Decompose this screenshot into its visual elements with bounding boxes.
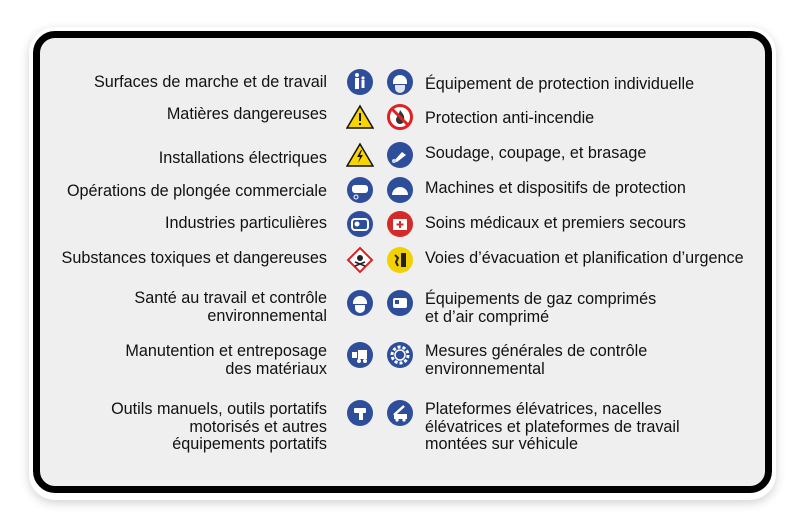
label: Santé au travail et contrôle bbox=[134, 289, 327, 307]
label bbox=[425, 342, 647, 378]
label: Industries particulières bbox=[165, 214, 327, 232]
label bbox=[125, 342, 327, 378]
icon: drill bbox=[347, 400, 373, 426]
label: des matériaux bbox=[225, 360, 327, 378]
label: Mesures générales de contrôle bbox=[425, 342, 647, 360]
right labels: Équipement de protection individuelle bbox=[425, 75, 694, 93]
icon: walking people bbox=[347, 69, 373, 95]
label: environnemental bbox=[425, 360, 545, 378]
label: Équipements de gaz comprimés bbox=[425, 290, 656, 308]
label: Outils manuels, outils portatifs bbox=[111, 400, 327, 418]
icon: emergency exit bbox=[387, 247, 413, 273]
label: Substances toxiques et dangereuses bbox=[62, 249, 327, 267]
icon: no fire bbox=[387, 104, 413, 130]
icon: diving mask bbox=[347, 177, 373, 203]
icon: helmet bbox=[387, 69, 413, 95]
icon: compressor bbox=[387, 290, 413, 316]
icon: helmet 2 bbox=[347, 290, 373, 316]
left labels: Surfaces de marche et de travail bbox=[94, 73, 327, 91]
label: environnemental bbox=[207, 306, 327, 324]
label bbox=[425, 400, 680, 453]
icon: industry bbox=[347, 211, 373, 237]
icon: electric warning bbox=[346, 142, 374, 167]
label: Soins médicaux et premiers secours bbox=[425, 214, 686, 232]
icon: welding bbox=[387, 142, 413, 168]
label: Protection anti-incendie bbox=[425, 109, 594, 127]
label: élévatrices et plateformes de travail bbox=[425, 418, 680, 436]
icon: machine guard bbox=[387, 177, 413, 203]
icon: gear bbox=[387, 342, 413, 368]
icon: forklift bbox=[347, 342, 373, 368]
label: Manutention et entreposage bbox=[125, 342, 327, 360]
label: motorisés et autres bbox=[189, 418, 327, 436]
label bbox=[425, 290, 656, 326]
label: équipements portatifs bbox=[172, 435, 327, 453]
label bbox=[111, 400, 327, 453]
label: Matières dangereuses bbox=[167, 105, 327, 123]
label: Installations électriques bbox=[159, 149, 327, 167]
label: et d’air comprimé bbox=[425, 308, 549, 326]
label: Machines et dispositifs de protection bbox=[425, 179, 686, 197]
label bbox=[134, 289, 327, 324]
label: Plateformes élévatrices, nacelles bbox=[425, 400, 662, 418]
label: Soudage, coupage, et brasage bbox=[425, 144, 646, 162]
icon: warning bbox=[346, 104, 374, 129]
icon: toxic bbox=[346, 246, 374, 274]
label: Opérations de plongée commerciale bbox=[67, 182, 327, 200]
icon: first aid bbox=[387, 211, 413, 237]
label: montées sur véhicule bbox=[425, 435, 578, 453]
icon: lift truck bbox=[387, 400, 413, 426]
label: Voies d’évacuation et planification d’urgence bbox=[425, 249, 744, 267]
